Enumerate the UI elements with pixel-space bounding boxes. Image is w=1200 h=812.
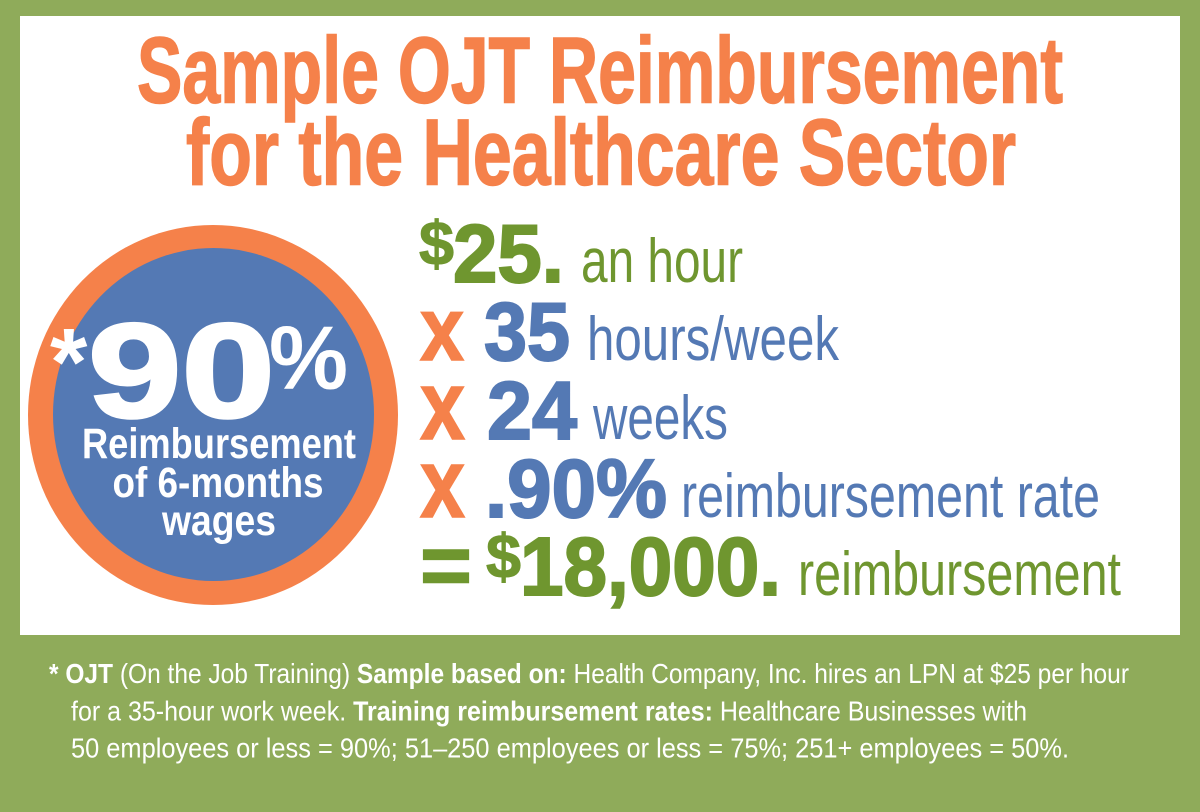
calculation line: hours per week: 35 [484,285,570,378]
calculation line: weeks: weeks [592,384,728,453]
white main panel [20,16,1180,635]
circle badge [28,225,398,605]
badge text: of 6-months [112,459,324,507]
calculation line: total [420,518,1121,614]
badge text: Reimbursement [82,420,356,468]
badge percent sign: % [269,309,348,409]
badge outer ring [28,225,398,605]
footnote: for a 35-hour work week. Training reimbursement rates: Healthcare Businesses with [71,696,1027,726]
calculation line: hourly rate: an hour [581,227,743,296]
badge text [82,420,356,545]
calculation line: weeks: 24 [487,364,577,457]
calculation line: hourly rate: $ [419,210,454,279]
calculation line: weeks: x [420,350,465,460]
title [137,18,1063,204]
calculation line: total: $ [486,523,521,592]
calculation line: hours per week: x [420,280,464,380]
calculation line: reimbursement rate: .90% [485,442,667,535]
calculation line: hours per week: hours/week [587,305,840,374]
footnote [49,658,1129,764]
footnote: 50 employees or less = 90%; 51–250 employees or less = 75%; 251+ employees = 50%. [71,732,1069,764]
badge number: 90 [88,297,275,446]
badge inner disc [53,248,374,581]
badge text: wages [161,497,276,545]
footnote: * OJT (On the Job Training) Sample based on: Health Company, Inc. hires an LPN at $25 per hour [49,658,1129,689]
calculation line: reimbursement rate [420,428,1100,538]
badge asterisk: * [50,309,88,416]
calculation line: reimbursement rate: x [420,428,465,538]
calculation line: hourly rate: 25. [453,207,564,300]
calculation line: total: = [420,518,472,614]
calculation line: hourly rate [419,207,743,300]
calculation line: hours per week [420,280,840,380]
calculation line: total: reimbursement [798,540,1121,609]
calculation line: total: 18,000. [520,520,781,613]
calculation line: weeks [420,350,728,460]
